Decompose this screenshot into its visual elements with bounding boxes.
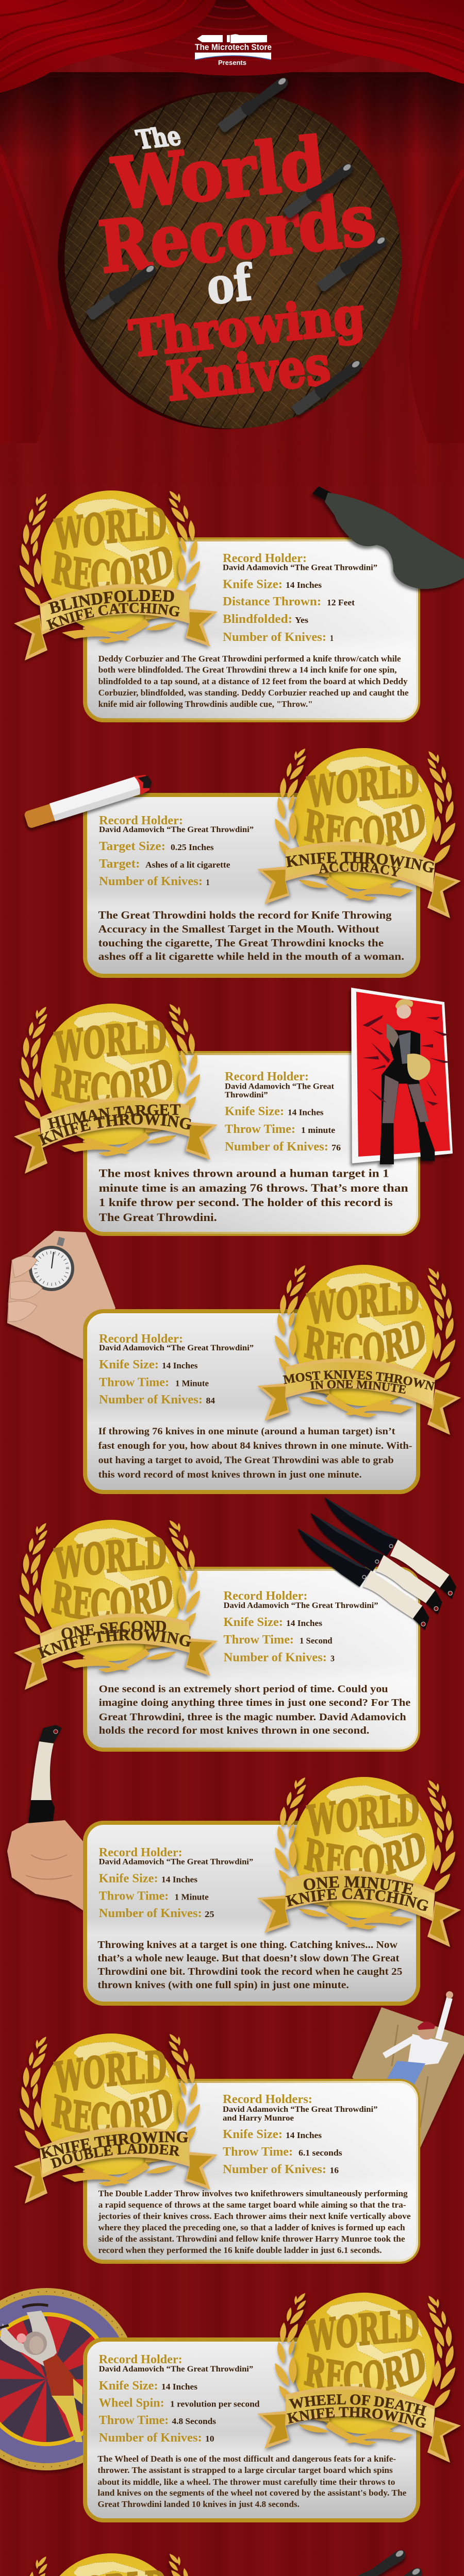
text: wheel of death stats: 14 Inches	[161, 2382, 198, 2392]
text: wheel of death stats: Knife Size:	[99, 2379, 158, 2393]
text: blindfolded knife catching stats: 14 Inches	[286, 580, 322, 590]
badge: most knives thrown in one minute: WORLD	[306, 1282, 419, 1324]
badge: most knives thrown in one minute: IN ONE MINUTE	[310, 1380, 406, 1394]
badge: one minute knife catching: WORLD	[306, 1785, 420, 1846]
text: knife throwing accuracy description	[98, 909, 404, 962]
text: blindfolded knife catching description: knife mid air following Throwdinis audible cue, "Throw."	[98, 699, 313, 709]
panel: wheel of death knife throwing	[85, 2340, 418, 2520]
text: double ladder stats: and Harry Munroe	[223, 2114, 294, 2123]
text: blindfolded knife catching stats: Yes	[295, 615, 309, 625]
text: blindfolded knife catching description: Corbuzier, blindfolded, was standing. Deddy Corbuzier reached up and caught the	[98, 688, 409, 698]
illustration: man spread on target board	[352, 1991, 464, 2148]
text: one minute catching description: that’s a whole new leauge. But that doesn’t slow down The Great	[97, 1953, 400, 1964]
illustration: three throwing knives	[298, 1498, 456, 1630]
text: double ladder description: side of the assistant. Throwdini and fellow knife thrower Harry Munroe took the	[98, 2234, 405, 2244]
text: one second description: Great Throwdini, three is the magic number. David Adamovich	[99, 1711, 406, 1723]
panel: knife throwing double ladder	[85, 2081, 418, 2262]
text: human target stats: 1 minute	[301, 1125, 335, 1135]
text: wheel of death description: about its middle, like a wheel. The thrower must carefully time their throws to	[97, 2477, 395, 2487]
text: knife throwing accuracy stats: Target Size:	[99, 840, 165, 853]
text: human target description: The Great Throwdini.	[99, 1211, 217, 1224]
text: wheel of death stats	[99, 2353, 259, 2445]
text: blindfolded knife catching stats: Knife Size:	[223, 578, 283, 591]
text: one minute catching stats: Throw Time:	[99, 1890, 169, 1903]
text: most knives in one minute stats: 1 Minute	[175, 1379, 209, 1388]
badge: human target knife throwing: KNIFE THROWING	[38, 1113, 192, 1146]
text: blindfolded knife catching description: both were blindfolded. The Great Throwdini threw a 14 inch knife for one spin,	[98, 665, 397, 675]
text: human target stats: Number of Knives:	[225, 1140, 328, 1154]
text: knife throwing accuracy stats: David Adamovich “The Great Throwdini”	[99, 825, 254, 834]
panel: blindfolded knife catching	[85, 539, 418, 720]
text: double ladder stats: 16	[330, 2165, 339, 2175]
text: one minute catching stats: Knife Size:	[99, 1872, 158, 1886]
text: double ladder stats	[223, 2093, 377, 2176]
illustration: fist holding throwing knife	[7, 1725, 83, 1910]
text: wheel of death stats: 4.8 Seconds	[172, 2416, 217, 2426]
title text: World	[108, 122, 329, 226]
badge: knife throwing accuracy	[257, 745, 461, 918]
badge: wheel of death knife throwing	[257, 2290, 461, 2463]
text: knife throwing accuracy stats: 1	[206, 877, 209, 887]
badge: wheel of death knife throwing: WORLD	[306, 2301, 420, 2362]
text: human target stats: David Adamovich “The Great	[225, 1082, 335, 1091]
badge: one minute knife catching: RECORD	[302, 1822, 429, 1888]
text: most knives in one minute stats: Throw Time:	[99, 1376, 169, 1389]
title text	[95, 121, 379, 413]
text: most knives in one minute stats: Number of Knives:	[99, 1393, 203, 1406]
text: most knives in one minute description: out having a target to avoid, The Great Throwdini was able to grab	[98, 1455, 394, 1466]
logo: The Microtech Store presents	[195, 34, 272, 66]
text: human target stats	[225, 1070, 341, 1154]
text: human target description: minute time is an amazing 76 throws. That’s more than	[99, 1181, 408, 1194]
text: wheel of death description	[97, 2454, 406, 2509]
text: one second stats: Knife Size:	[224, 1616, 283, 1629]
text: blindfolded knife catching stats: Blindfolded:	[223, 613, 292, 626]
panel: one minute knife catching	[85, 1823, 418, 2004]
badge: one second knife throwing: KNIFE THROWING	[36, 1625, 194, 1662]
text: knife throwing accuracy stats: Target:	[99, 857, 140, 871]
text: human target description	[99, 1166, 408, 1224]
panel: knife throwing accuracy	[85, 795, 418, 976]
text: double ladder description: jectories of their knives cross. Each thrower aims their next knife vertically above	[98, 2211, 411, 2221]
text: knife throwing accuracy stats: Number of Knives:	[99, 875, 203, 888]
text: one second description: One second is an extremely short period of time. Could you	[99, 1684, 388, 1695]
text: blindfolded knife catching description	[98, 654, 409, 709]
badge: blindfolded knife catching: BLINDFOLDED	[48, 589, 174, 614]
text: blindfolded knife catching stats: David Adamovich “The Great Throwdini”	[223, 564, 377, 572]
text: knife throwing accuracy description: The Great Throwdini holds the record for Knife Throwing	[98, 909, 392, 921]
badge: knife throwing accuracy: ACCURACY	[319, 862, 401, 877]
title text: Knives	[163, 334, 333, 413]
text: wheel of death stats: Wheel Spin:	[99, 2397, 164, 2410]
text: one minute catching description: thrown knives (with one full spin) in just one minute.	[97, 1980, 349, 1991]
text: one minute catching stats: 1 Minute	[175, 1892, 209, 1902]
text: wheel of death description: Great Throwdini landed 10 knives in just 4.8 seconds.	[97, 2499, 300, 2509]
text: knife throwing accuracy description: ashes off a lit cigarette while held in the mouth of a woman.	[98, 950, 404, 962]
text: one minute catching stats: Number of Knives:	[99, 1907, 202, 1920]
badge: knife throwing double ladder: RECORD	[49, 2078, 176, 2144]
badge: blindfolded knife catching	[14, 488, 218, 660]
illustration: lit cigarette	[23, 772, 155, 830]
text: most knives in one minute stats: Record Holder:	[99, 1332, 183, 1346]
badge: one second knife throwing: RECORD	[51, 1576, 172, 1619]
text: most knives in one minute stats: 84	[206, 1396, 215, 1405]
illustration: six black knives	[333, 2547, 464, 2576]
text: one second stats: 1 Second	[300, 1636, 333, 1646]
text: blindfolded knife catching stats: Record Holder:	[223, 552, 307, 565]
badge: one minute knife catching: ONE MINUTE	[302, 1873, 416, 1899]
text: double ladder stats: 14 Inches	[286, 2130, 322, 2140]
badge: knife throwing accuracy: KNIFE THROWING	[286, 852, 434, 873]
text: human target stats: 76	[332, 1143, 341, 1153]
text: knife throwing accuracy description: Accuracy in the Smallest Target in the Mouth. Without	[98, 923, 379, 935]
text: human target stats: Throw Time:	[225, 1123, 295, 1136]
text: one minute catching description: Throwdini one bit. Throwdini took the record when he caught 25	[97, 1967, 403, 1977]
text: double ladder description: record when they performed the 16 knife double ladder in just 6.1 seconds.	[98, 2245, 382, 2255]
badge: wheel of death knife throwing: KNIFE THROWING	[286, 2404, 428, 2432]
text: one second stats: Number of Knives:	[224, 1651, 327, 1664]
text: knife throwing accuracy description: touching the cigarette, The Great Throwdini knocks the	[98, 937, 384, 949]
knives stuck in board	[85, 75, 391, 416]
photo: woman surrounded by thrown knives	[351, 988, 453, 1164]
illustration: wheel of death	[0, 2288, 138, 2470]
badge: knife throwing double ladder: DOUBLE LADDER	[49, 2141, 181, 2172]
text: human target description: 1 knife throw per second. The holder of this record is	[99, 1196, 393, 1209]
badge: one minute knife catching: KNIFE CATCHING	[285, 1885, 431, 1915]
title text: of	[204, 253, 257, 316]
text: most knives in one minute stats: 14 Inches	[162, 1361, 198, 1370]
text: blindfolded knife catching stats: 12 Feet	[327, 598, 355, 607]
badge: ladder of death knife throwing	[14, 2551, 218, 2576]
text: one second stats: Record Holder:	[224, 1589, 307, 1603]
text: one minute catching stats: David Adamovich “The Great Throwdini”	[99, 1858, 253, 1867]
panel: human target knife throwing	[85, 1053, 418, 1234]
text: double ladder description: where they placed the preceding one, so that a ladder of knives is formed up each	[98, 2223, 405, 2232]
badge: human target knife throwing: RECORD	[51, 1060, 172, 1103]
text: double ladder stats: David Adamovich “The Great Throwdini”	[223, 2105, 377, 2114]
text: one minute catching description	[97, 1940, 403, 1991]
text: most knives in one minute stats: David Adamovich “The Great Throwdini”	[99, 1344, 254, 1352]
badge: most knives thrown in one minute: MOST KNIVES THROWN	[283, 1370, 435, 1391]
badge: blindfolded knife catching: WORLD	[53, 507, 166, 550]
panel: most knives thrown in one minute	[85, 1311, 418, 1492]
text: human target description: The most knives thrown around a human target in 1	[99, 1166, 389, 1180]
badge: human target knife throwing: WORLD	[53, 1020, 166, 1063]
text: human target stats: Knife Size:	[225, 1105, 284, 1118]
text: double ladder description: a rapid sequence of throws at the same target board while aiming so that the tra-	[98, 2200, 406, 2210]
text: one minute catching stats: 25	[205, 1909, 214, 1919]
text: double ladder stats: Knife Size:	[223, 2128, 283, 2141]
text: one second stats: David Adamovich “The Great Throwdini”	[224, 1601, 378, 1610]
text: wheel of death description: thrower. The assistant is strapped to a large circular target board which spins	[97, 2465, 393, 2475]
text: knife throwing accuracy stats: Ashes of a lit cigarette	[145, 860, 230, 870]
badge: knife throwing accuracy: RECORD	[304, 804, 425, 846]
badge: knife throwing double ladder: KNIFE THROWING	[39, 2128, 189, 2162]
text: wheel of death description: land knives on the segments of the wheel not covered by the assistant's body. The	[97, 2488, 406, 2498]
logo: The Microtech Store presents: Presents	[218, 59, 246, 66]
badge: most knives thrown in one minute	[257, 1262, 461, 1435]
badge: one second knife throwing: ONE SECOND	[61, 1621, 166, 1638]
text: human target stats: Throwdini”	[225, 1091, 268, 1099]
text: blindfolded knife catching stats	[223, 552, 377, 644]
text: knife throwing accuracy stats	[99, 814, 254, 888]
text: most knives in one minute description: fast enough for you, how about 84 knives thrown in one minute. With-	[98, 1440, 412, 1451]
text: one second stats: 14 Inches	[286, 1618, 323, 1628]
text: one second description	[99, 1684, 410, 1736]
text: one second stats: Throw Time:	[224, 1633, 294, 1647]
text: one minute catching description: Throwing knives at a target is one thing. Catching knives... Now	[97, 1940, 397, 1951]
text: one minute catching stats: Record Holder:	[99, 1846, 183, 1859]
badge: knife throwing double ladder: WORLD	[53, 2042, 167, 2103]
badge: blindfolded knife catching: KNIFE CATCHING	[46, 603, 180, 630]
text: most knives in one minute description	[98, 1426, 412, 1480]
text: double ladder stats: 6.1 seconds	[299, 2148, 342, 2158]
logo: The Microtech Store presents: The Microtech Store	[195, 42, 272, 52]
text: wheel of death stats: Throw Time:	[99, 2414, 169, 2427]
text: human target stats: 14 Inches	[288, 1108, 324, 1117]
text: wheel of death stats: David Adamovich “The Great Throwdini”	[99, 2365, 253, 2374]
text: one second stats: 3	[330, 1654, 335, 1663]
text: blindfolded knife catching stats: 1	[330, 633, 334, 643]
badge: blindfolded knife catching: RECORD	[51, 547, 172, 590]
badge: human target knife throwing: HUMAN TARGET	[47, 1104, 180, 1129]
text: one second description: holds the record for most knives thrown in one second.	[99, 1725, 369, 1736]
badge: one minute knife catching	[257, 1774, 461, 1947]
badge: one second knife throwing	[14, 1517, 218, 1690]
illustration: blindfold mask	[312, 486, 464, 589]
text: wheel of death stats: 10	[205, 2434, 214, 2444]
title text: Throwing	[127, 286, 367, 368]
panel: one second knife throwing	[85, 1569, 418, 1750]
badge: knife throwing accuracy: WORLD	[306, 765, 419, 808]
text: most knives in one minute stats: Knife Size:	[99, 1358, 159, 1371]
text: double ladder stats: Number of Knives:	[223, 2163, 326, 2176]
illustration: hand with stopwatch	[7, 1231, 115, 1359]
text: one second stats	[224, 1589, 378, 1664]
badge: most knives thrown in one minute: RECORD	[304, 1321, 425, 1363]
text: blindfolded knife catching description: blindfolded to a tap sound, at a distance of 12 feet from the board at which Deddy	[98, 676, 408, 686]
text: blindfolded knife catching stats: Number of Knives:	[223, 631, 326, 644]
badge: human target knife throwing	[14, 1001, 218, 1174]
text: most knives in one minute stats	[99, 1332, 254, 1406]
text: blindfolded knife catching description: Deddy Corbuzier and The Great Throwdini performed a knife throw/catch while	[98, 654, 401, 664]
badge: knife throwing double ladder	[14, 2031, 218, 2204]
text: double ladder description: The Double Ladder Throw involves two knifethrowers simultaneously performing	[98, 2189, 408, 2198]
top curtain valance	[0, 0, 464, 93]
text: double ladder description	[98, 2189, 411, 2255]
text: wheel of death description: The Wheel of Death is one of the most difficult and dangerous feats for a knife-	[97, 2454, 396, 2464]
text: most knives in one minute description: this word record of most knives thrown in just one minute.	[98, 1469, 362, 1480]
text: one second description: imagine doing anything three times in just one second? For The	[99, 1697, 410, 1708]
text: double ladder stats: Record Holders:	[223, 2093, 312, 2106]
text: one minute catching stats: 14 Inches	[161, 1875, 198, 1885]
title disc: wooden target board with title	[58, 75, 402, 429]
title text: The	[134, 121, 184, 155]
text: human target stats: Record Holder:	[225, 1070, 309, 1083]
text: one minute catching stats	[99, 1846, 253, 1920]
title text: Records	[95, 178, 379, 290]
text: wheel of death stats: Number of Knives:	[99, 2431, 202, 2445]
text: knife throwing accuracy stats: 0.25 Inches	[171, 842, 214, 852]
text: wheel of death stats: Record Holder:	[99, 2353, 183, 2366]
text: knife throwing accuracy stats: Record Holder:	[99, 814, 183, 827]
badge: wheel of death knife throwing: WHEEL OF DEATH	[288, 2391, 428, 2419]
text: wheel of death stats: 1 revolution per second	[170, 2399, 260, 2409]
badge: one second knife throwing: WORLD	[53, 1536, 166, 1580]
text: most knives in one minute description: If throwing 76 knives in one minute (around a human target) isn’t	[98, 1426, 395, 1437]
badge: wheel of death knife throwing: RECORD	[302, 2337, 429, 2403]
text: double ladder stats: Throw Time:	[223, 2145, 293, 2159]
text: blindfolded knife catching stats: Distance Thrown:	[223, 595, 321, 608]
